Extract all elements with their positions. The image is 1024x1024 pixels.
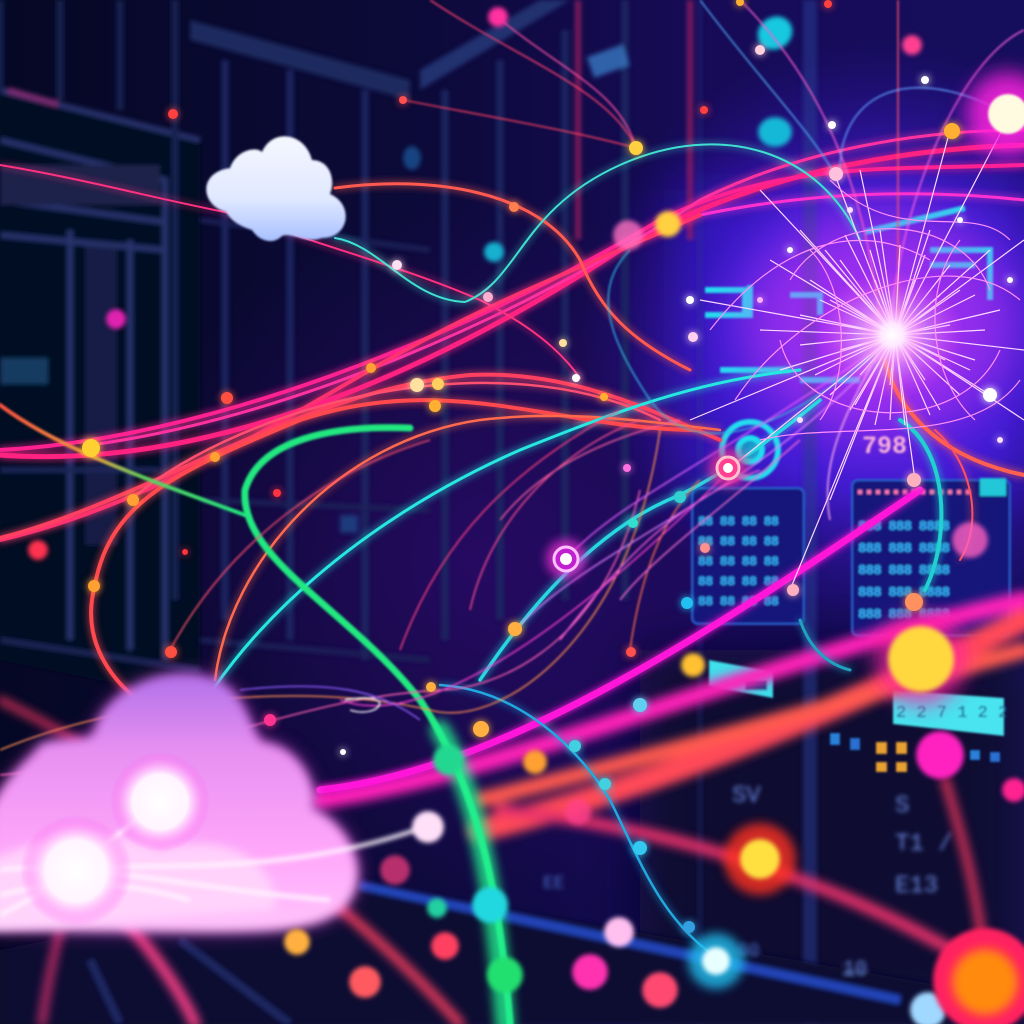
label chip xyxy=(709,660,773,698)
hub: radiating filaments xyxy=(690,115,1024,590)
node: cyan white xyxy=(688,933,744,989)
hub: white core xyxy=(815,270,965,400)
stream: cyan main xyxy=(170,370,800,770)
large glowing pink cloud xyxy=(0,674,430,932)
small white cloud xyxy=(206,136,346,241)
screen: right data panel: 888 888 8888 xyxy=(858,563,950,579)
large glowing nodes xyxy=(546,72,1024,1024)
node: yellow medium xyxy=(724,823,796,895)
screen: left data panel: 88 88 88 88 xyxy=(698,534,779,549)
indicator lights xyxy=(830,733,1000,772)
readout number: 798 xyxy=(862,432,907,461)
stream: pink band across centre xyxy=(0,145,1024,457)
server racks: left wall xyxy=(0,0,200,700)
screen: upper hologram readouts xyxy=(705,208,990,478)
screen: right data panel: 888 888 8888 xyxy=(858,607,950,623)
node: yellow large xyxy=(875,613,967,705)
floor and bottom right dashboard: S xyxy=(895,793,909,820)
floor and bottom right dashboard: 10 xyxy=(843,958,867,981)
dashboard panels xyxy=(692,208,1010,772)
screen: left data panel: 88 88 88 88 xyxy=(698,594,779,609)
screen: right data panel: 888 888 8888 xyxy=(858,541,950,557)
node: orange corner xyxy=(933,928,1024,1024)
floor and bottom right dashboard: 00 xyxy=(738,941,760,961)
thin web lines xyxy=(0,0,1024,775)
floor and bottom right dashboard: E13 xyxy=(895,873,938,900)
screen: right data panel: 888 888 8888 xyxy=(858,519,950,535)
floor and bottom right dashboard: EE xyxy=(543,874,565,894)
server racks: centre wall xyxy=(190,0,810,1024)
floor and bottom right dashboard: T1 / xyxy=(895,831,953,858)
node: top-right white xyxy=(966,72,1024,156)
screen: right data panel xyxy=(852,478,1010,636)
screen: left data panel: 88 88 88 88 xyxy=(698,574,779,589)
green stream xyxy=(0,405,510,1024)
screen: left data panel: 88 88 88 88 xyxy=(698,514,779,529)
floor and bottom right dashboard xyxy=(0,783,1024,1024)
top-right cyan blobs xyxy=(484,10,799,262)
floor and bottom right dashboard: SV xyxy=(732,783,761,810)
stream: from small cloud xyxy=(335,184,690,370)
screen: left data panel xyxy=(692,488,804,624)
stream: red loop xyxy=(91,400,700,720)
node: ring pink xyxy=(708,448,748,488)
label chip with number xyxy=(893,690,1008,736)
hub glow xyxy=(740,210,1020,430)
broad blurred pink streams xyxy=(0,600,1024,1024)
stream: cyan arc from small cloud xyxy=(335,144,860,302)
screen: left data panel: 88 88 88 88 xyxy=(698,554,779,569)
node: ring magenta xyxy=(546,539,586,579)
label chip with number: 2 2 7 1 2 2 xyxy=(896,704,1008,723)
screen: right data panel: 888 888 8888 xyxy=(858,585,950,601)
stream: orange-red from hub xyxy=(885,360,1024,475)
stream: magenta right side xyxy=(320,490,920,790)
